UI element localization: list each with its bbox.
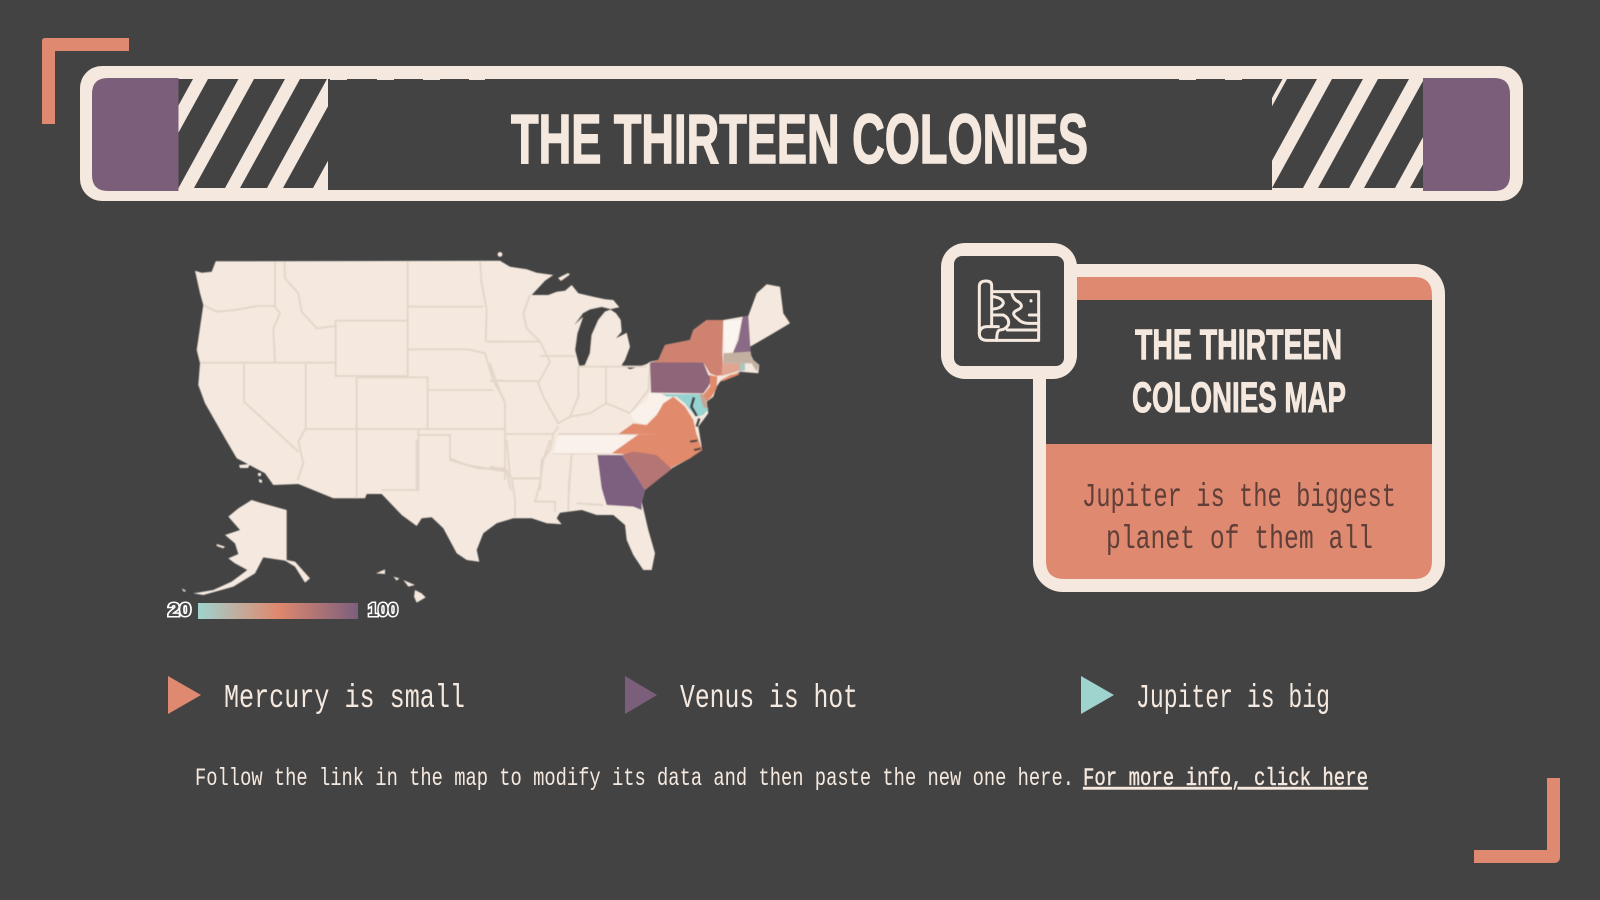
map: New Jersey <box>702 375 717 402</box>
map: Vermont <box>723 320 742 353</box>
map: Chesapeake Bay <box>691 397 699 427</box>
map: Pamlico Sound <box>690 441 701 450</box>
map: Maryland <box>662 394 708 417</box>
title: THE THIRTEEN COLONIES <box>511 100 1088 178</box>
card: top salmon strip <box>1046 277 1432 300</box>
banner: title centre panel <box>328 79 1272 190</box>
card: heading: THE THIRTEEN <box>1135 321 1342 369</box>
legend: maximum label: 100 <box>368 600 398 620</box>
map: Rhode Island <box>740 363 745 372</box>
map: southern coloured states <box>597 452 672 510</box>
corner bracket: top left <box>42 38 129 124</box>
map: Isle Royale and small marks <box>239 252 570 483</box>
icon: rolled map <box>979 281 1039 340</box>
map: Massachusetts <box>723 352 759 372</box>
text: link: For more info, click here <box>1083 764 1368 793</box>
text: Mercury is small: Mercury is small <box>224 680 465 717</box>
map: Connecticut <box>722 363 740 376</box>
map: Delaware <box>699 394 708 409</box>
map: Alaska <box>182 500 310 595</box>
text: instructions: Follow the link in the map to modify its data and then paste the new one here. <box>195 764 1074 793</box>
map: South Carolina <box>622 452 672 490</box>
arrow: purple triangle <box>625 676 657 714</box>
map: Hawaii <box>376 569 426 603</box>
title banner <box>80 66 1523 201</box>
map legend <box>168 600 398 620</box>
map: North Carolina <box>612 434 702 468</box>
bullet: Mercury <box>168 676 465 717</box>
map: southern state borders <box>400 440 603 517</box>
banner: small marks along top edge <box>330 79 1242 80</box>
banner: right purple block <box>1423 78 1510 191</box>
card: heading: COLONIES MAP <box>1132 374 1346 422</box>
text: Jupiter is big: Jupiter is big <box>1136 680 1330 717</box>
icon box: map scroll <box>941 243 1077 379</box>
legend: minimum label: 20 <box>168 600 191 620</box>
map: Tennessee <box>553 435 638 453</box>
map: eastern coloured states <box>553 316 759 468</box>
bullet: Venus <box>625 676 858 717</box>
card: salmon text area <box>1046 444 1432 579</box>
map: contiguous states land <box>195 261 790 570</box>
map: Georgia <box>597 455 645 510</box>
map: lake Michigan <box>574 307 612 367</box>
arrow: salmon triangle <box>168 676 201 714</box>
card: description: Jupiter is the biggest <box>1082 479 1396 516</box>
map: eastern state borders <box>490 295 650 490</box>
footer note <box>195 764 1368 793</box>
banner: left stripes <box>178 79 328 188</box>
map: Virginia <box>618 397 697 435</box>
map: Long Island <box>720 373 740 381</box>
legend: colour scale <box>198 603 358 619</box>
map: West Virginia <box>630 393 673 425</box>
map: western state borders <box>200 262 505 498</box>
map: Alaska and Hawaii <box>182 500 426 603</box>
corner bracket: bottom right <box>1474 778 1560 863</box>
banner: left purple block <box>92 78 178 191</box>
card: dark title area <box>1046 300 1432 444</box>
map: New York <box>650 320 728 376</box>
text: Venus is hot: Venus is hot <box>680 680 858 717</box>
arrow: teal triangle <box>1081 676 1114 714</box>
panel: thirteen colonies map card <box>1033 264 1445 592</box>
card: description: planet of them all <box>1106 521 1373 558</box>
map: New Hampshire <box>733 316 751 353</box>
banner: right stripes <box>1272 79 1423 188</box>
map: Pennsylvania <box>650 362 713 393</box>
bullet: Jupiter <box>1081 676 1330 717</box>
US map choropleth <box>182 252 790 603</box>
